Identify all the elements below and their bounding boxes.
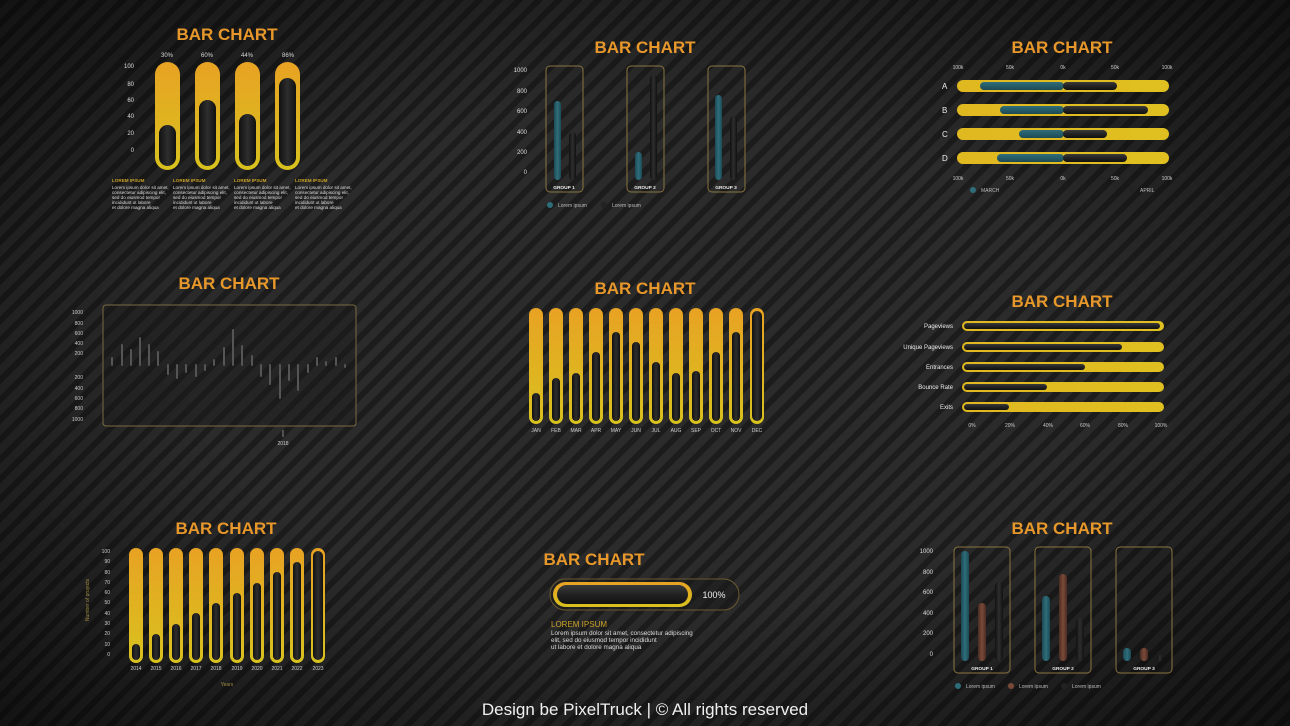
y axis: 800 — [517, 89, 528, 95]
month labels: NOV — [731, 428, 742, 434]
y axis: 30 — [104, 621, 110, 627]
scale labels — [953, 65, 1173, 182]
group labels — [553, 185, 737, 191]
y axis: 100 — [124, 64, 135, 70]
scale labels: 0k — [1060, 65, 1066, 71]
scale labels: 50k — [1111, 65, 1120, 71]
scale labels: 50k — [1006, 65, 1015, 71]
legend: Lorem ipsum — [558, 203, 587, 209]
text block — [551, 620, 693, 651]
y axis: 0 — [107, 652, 110, 658]
x axis: 0% — [968, 423, 976, 429]
panel: top-left pill bar chart — [112, 25, 352, 210]
y axis: 1000 — [72, 417, 83, 423]
percent labels: 44% — [241, 53, 254, 59]
month labels: JUL — [652, 428, 661, 434]
group labels — [971, 666, 1155, 672]
scale labels: 100k — [1162, 65, 1173, 71]
y axis: 20 — [104, 631, 110, 637]
y axis: 0 — [930, 652, 934, 658]
bars — [129, 548, 325, 663]
bars — [529, 308, 764, 424]
text blocks: incididunt ut labore — [234, 200, 273, 205]
y axis: 400 — [923, 611, 934, 617]
text blocks — [112, 178, 352, 210]
y axis: 1000 — [72, 310, 83, 316]
y axis — [102, 549, 110, 658]
y axis: 90 — [104, 559, 110, 565]
scale labels: 100k — [1162, 176, 1173, 182]
month labels: MAY — [611, 428, 622, 434]
group labels: GROUP 3 — [715, 185, 737, 191]
scale labels: 50k — [1111, 176, 1120, 182]
frame — [103, 305, 356, 426]
text blocks: sed do eiusmod tempor — [295, 195, 343, 200]
text blocks: LOREM IPSUM — [112, 178, 145, 183]
year labels: 2017 — [190, 666, 202, 672]
y axis: 20 — [127, 131, 135, 137]
x axis: 100% — [1155, 423, 1168, 429]
group labels: GROUP 2 — [1052, 666, 1074, 672]
percent labels: 30% — [161, 53, 174, 59]
title: BAR CHART — [178, 274, 280, 293]
text blocks: et dolore magna aliqua — [173, 205, 220, 210]
text blocks: Lorem ipsum dolor sit amet, — [173, 185, 230, 190]
title: BAR CHART — [1011, 292, 1113, 311]
text blocks: Lorem ipsum dolor sit amet, — [295, 185, 352, 190]
text blocks: et dolore magna aliqua — [295, 205, 342, 210]
text blocks: incididunt ut labore — [112, 200, 151, 205]
x axis: 20% — [1005, 423, 1016, 429]
y axis: 800 — [75, 406, 83, 412]
panel: bottom-right grouped bar chart — [920, 519, 1172, 690]
title: BAR CHART — [1011, 38, 1113, 57]
y axis: 1000 — [920, 549, 934, 555]
y axis: 400 — [517, 130, 528, 136]
y axis: 60 — [104, 590, 110, 596]
year labels: 2020 — [251, 666, 263, 672]
group labels: GROUP 1 — [971, 666, 993, 672]
year labels: 2016 — [170, 666, 182, 672]
scale labels: 100k — [953, 65, 964, 71]
row labels: B — [942, 106, 947, 115]
month labels — [531, 428, 763, 434]
text blocks: LOREM IPSUM — [234, 178, 267, 183]
scale labels: 100k — [953, 176, 964, 182]
legend — [970, 187, 1155, 194]
y axis: 600 — [923, 590, 934, 596]
y axis: 40 — [127, 114, 135, 120]
footer credit: Design be PixelTruck | © All rights reserved — [482, 700, 808, 719]
legend: Lorem ipsum — [966, 684, 995, 690]
y axis: 50 — [104, 600, 110, 606]
row labels: Pageviews — [924, 324, 953, 330]
year labels: 2022 — [291, 666, 303, 672]
group labels: GROUP 1 — [553, 185, 575, 191]
x axis: 40% — [1043, 423, 1054, 429]
scale labels: 0k — [1060, 176, 1066, 182]
y axis — [514, 68, 528, 176]
bars — [155, 62, 300, 170]
text blocks: LOREM IPSUM — [173, 178, 206, 183]
y axis — [124, 64, 135, 154]
text blocks: consectetur adipiscing elit, — [173, 190, 227, 195]
bars — [961, 551, 1163, 661]
text blocks: sed do eiusmod tempor — [173, 195, 221, 200]
legend — [547, 202, 641, 209]
row labels: A — [942, 82, 948, 91]
y axis — [72, 310, 83, 423]
year labels: 2019 — [231, 666, 243, 672]
y axis: 200 — [75, 375, 83, 381]
bars — [554, 75, 737, 180]
group labels: GROUP 2 — [634, 185, 656, 191]
y axis: 0 — [524, 170, 528, 176]
month labels: JAN — [531, 428, 541, 434]
text blocks: sed do eiusmod tempor — [112, 195, 160, 200]
row labels — [903, 324, 954, 411]
month labels: SEP — [691, 428, 702, 434]
group labels: GROUP 3 — [1133, 666, 1155, 672]
panel: middle-left waveform chart — [72, 274, 356, 447]
percent labels — [161, 53, 295, 59]
text blocks: et dolore magna aliqua — [112, 205, 159, 210]
month labels: JUN — [631, 428, 641, 434]
text block: Lorem ipsum dolor sit amet, consectetur adipiscing — [551, 630, 693, 637]
month labels: DEC — [752, 428, 763, 434]
bars — [962, 321, 1164, 412]
text blocks: consectetur adipiscing elit, — [234, 190, 288, 195]
year labels — [130, 666, 324, 672]
y axis: 600 — [517, 109, 528, 115]
row labels — [942, 82, 948, 163]
y axis: 200 — [75, 351, 83, 357]
row labels: Exits — [940, 405, 953, 411]
progress bar — [550, 579, 739, 610]
text blocks: incididunt ut labore — [295, 200, 334, 205]
text block: LOREM IPSUM — [551, 620, 607, 629]
y axis: 400 — [75, 341, 83, 347]
y axis: 200 — [923, 631, 934, 637]
title: BAR CHART — [543, 550, 645, 569]
month labels: AUG — [671, 428, 682, 434]
text block: ut labore et dolore magna aliqua — [551, 644, 642, 651]
x axis: 80% — [1118, 423, 1129, 429]
row labels: Bounce Rate — [918, 385, 954, 391]
legend: Lorem ipsum — [1019, 684, 1048, 690]
title: BAR CHART — [1011, 519, 1113, 538]
y axis: 10 — [104, 642, 110, 648]
x label: 2018 — [277, 441, 289, 447]
x axis — [968, 423, 1168, 429]
panel: top-center grouped bar chart — [514, 38, 745, 209]
row labels: C — [942, 130, 948, 139]
text blocks: et dolore magna aliqua — [234, 205, 281, 210]
panel: middle-right horizontal progress bars — [903, 292, 1168, 429]
y axis: 80 — [127, 82, 135, 88]
year labels: 2023 — [312, 666, 324, 672]
year labels: 2015 — [150, 666, 162, 672]
x axis: 60% — [1080, 423, 1091, 429]
text blocks: consectetur adipiscing elit, — [112, 190, 166, 195]
x label — [277, 430, 289, 447]
y axis: 100 — [102, 549, 110, 555]
y axis: 400 — [75, 386, 83, 392]
y axis: 1000 — [514, 68, 528, 74]
month labels: MAR — [570, 428, 582, 434]
y axis: 0 — [131, 148, 135, 154]
percent labels: 86% — [282, 53, 295, 59]
month labels: APR — [591, 428, 602, 434]
y axis: 60 — [127, 98, 135, 104]
waveform bars — [112, 330, 345, 398]
title: BAR CHART — [594, 38, 696, 57]
legend: Lorem ipsum — [612, 203, 641, 209]
month labels: FEB — [551, 428, 562, 434]
row labels: Unique Pageviews — [903, 345, 953, 351]
year labels: 2018 — [210, 666, 222, 672]
title: BAR CHART — [175, 519, 277, 538]
progress bar: 100% — [702, 590, 726, 600]
panel: bottom-center progress bar — [543, 550, 739, 651]
y axis — [920, 549, 934, 658]
bars — [957, 80, 1169, 164]
scale labels: 50k — [1006, 176, 1015, 182]
y axis: 800 — [75, 321, 83, 327]
y axis: 600 — [75, 331, 83, 337]
text blocks: consectetur adipiscing elit, — [295, 190, 349, 195]
text blocks: incididunt ut labore — [173, 200, 212, 205]
text block: elit, sed do eiusmod tempor incididunt — [551, 637, 657, 644]
group boxes — [546, 66, 745, 192]
legend: MARCH — [981, 188, 1000, 194]
title: BAR CHART — [176, 25, 278, 44]
text blocks: LOREM IPSUM — [295, 178, 328, 183]
year labels: 2021 — [271, 666, 283, 672]
legend: Lorem ipsum — [1072, 684, 1101, 690]
text blocks: sed do eiusmod tempor — [234, 195, 282, 200]
axis title: Number of projects — [85, 578, 91, 621]
year labels: 2014 — [130, 666, 142, 672]
panel: top-right diverging bar chart — [942, 38, 1173, 194]
panel: bottom-left yearly bar chart — [85, 519, 325, 688]
month labels: OCT — [711, 428, 721, 434]
text blocks: Lorem ipsum dolor sit amet, — [234, 185, 291, 190]
panel: center monthly bar chart — [529, 279, 764, 434]
y axis: 200 — [517, 150, 528, 156]
title: BAR CHART — [594, 279, 696, 298]
row labels: Entrances — [926, 365, 953, 371]
y axis: 80 — [104, 570, 110, 576]
group boxes — [954, 547, 1172, 673]
row labels: D — [942, 154, 948, 163]
y axis: 800 — [923, 570, 934, 576]
y axis: 600 — [75, 396, 83, 402]
text blocks: Lorem ipsum dolor sit amet, — [112, 185, 169, 190]
legend: APRIL — [1140, 188, 1155, 194]
percent labels: 60% — [201, 53, 214, 59]
x axis title: Years — [221, 682, 234, 688]
y axis: 40 — [104, 611, 110, 617]
y axis: 70 — [104, 580, 110, 586]
legend — [955, 683, 1101, 690]
